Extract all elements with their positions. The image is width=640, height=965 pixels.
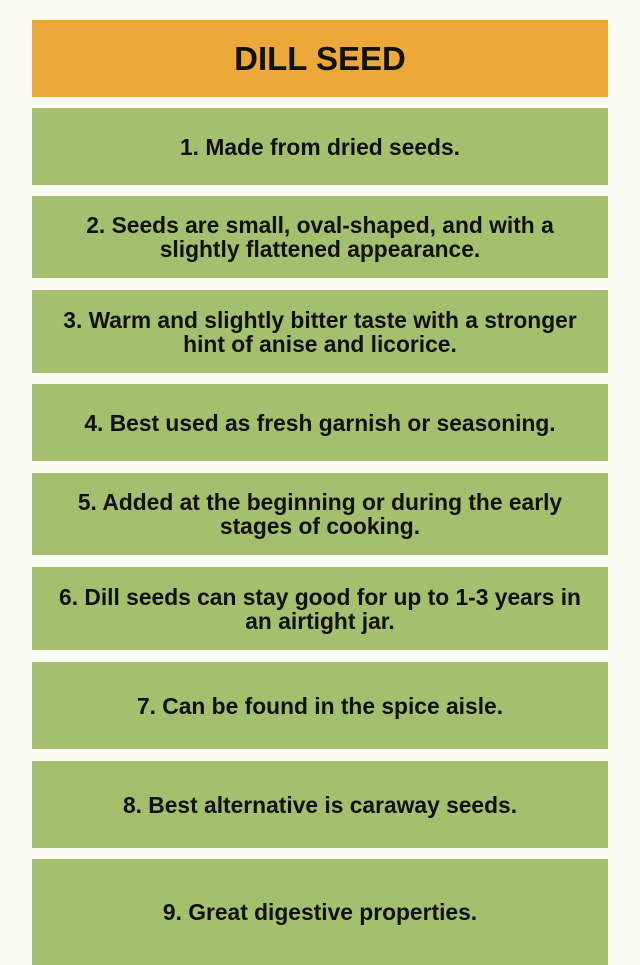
fact 8 [32, 761, 608, 848]
fact 2: 2. Seeds are small, oval-shaped, and with a [86, 212, 554, 238]
fact 5: stages of cooking. [220, 513, 420, 539]
fact 9: 9. Great digestive properties. [163, 899, 477, 925]
fact 9 [32, 859, 608, 965]
fact 1: 1. Made from dried seeds. [180, 134, 460, 160]
fact 6 [32, 567, 608, 650]
fact 3: 3. Warm and slightly bitter taste with a stronger [63, 306, 577, 332]
fact 2 [32, 196, 608, 278]
fact 4 [32, 384, 608, 461]
fact 2: slightly flattened appearance. [160, 236, 480, 262]
fact 8: 8. Best alternative is caraway seeds. [123, 792, 517, 818]
fact 3 [32, 290, 608, 373]
fact 7: 7. Can be found in the spice aisle. [137, 692, 503, 718]
fact 5: 5. Added at the beginning or during the early [78, 489, 562, 515]
fact 3: hint of anise and licorice. [183, 330, 457, 356]
fact 6: an airtight jar. [245, 608, 395, 634]
fact 5 [32, 473, 608, 555]
title [32, 20, 608, 97]
fact 7 [32, 662, 608, 749]
fact 4: 4. Best used as fresh garnish or seasoning. [84, 410, 556, 436]
fact 6: 6. Dill seeds can stay good for up to 1-3 years in [59, 584, 581, 610]
title: DILL SEED [234, 40, 406, 76]
fact 1 [32, 108, 608, 185]
